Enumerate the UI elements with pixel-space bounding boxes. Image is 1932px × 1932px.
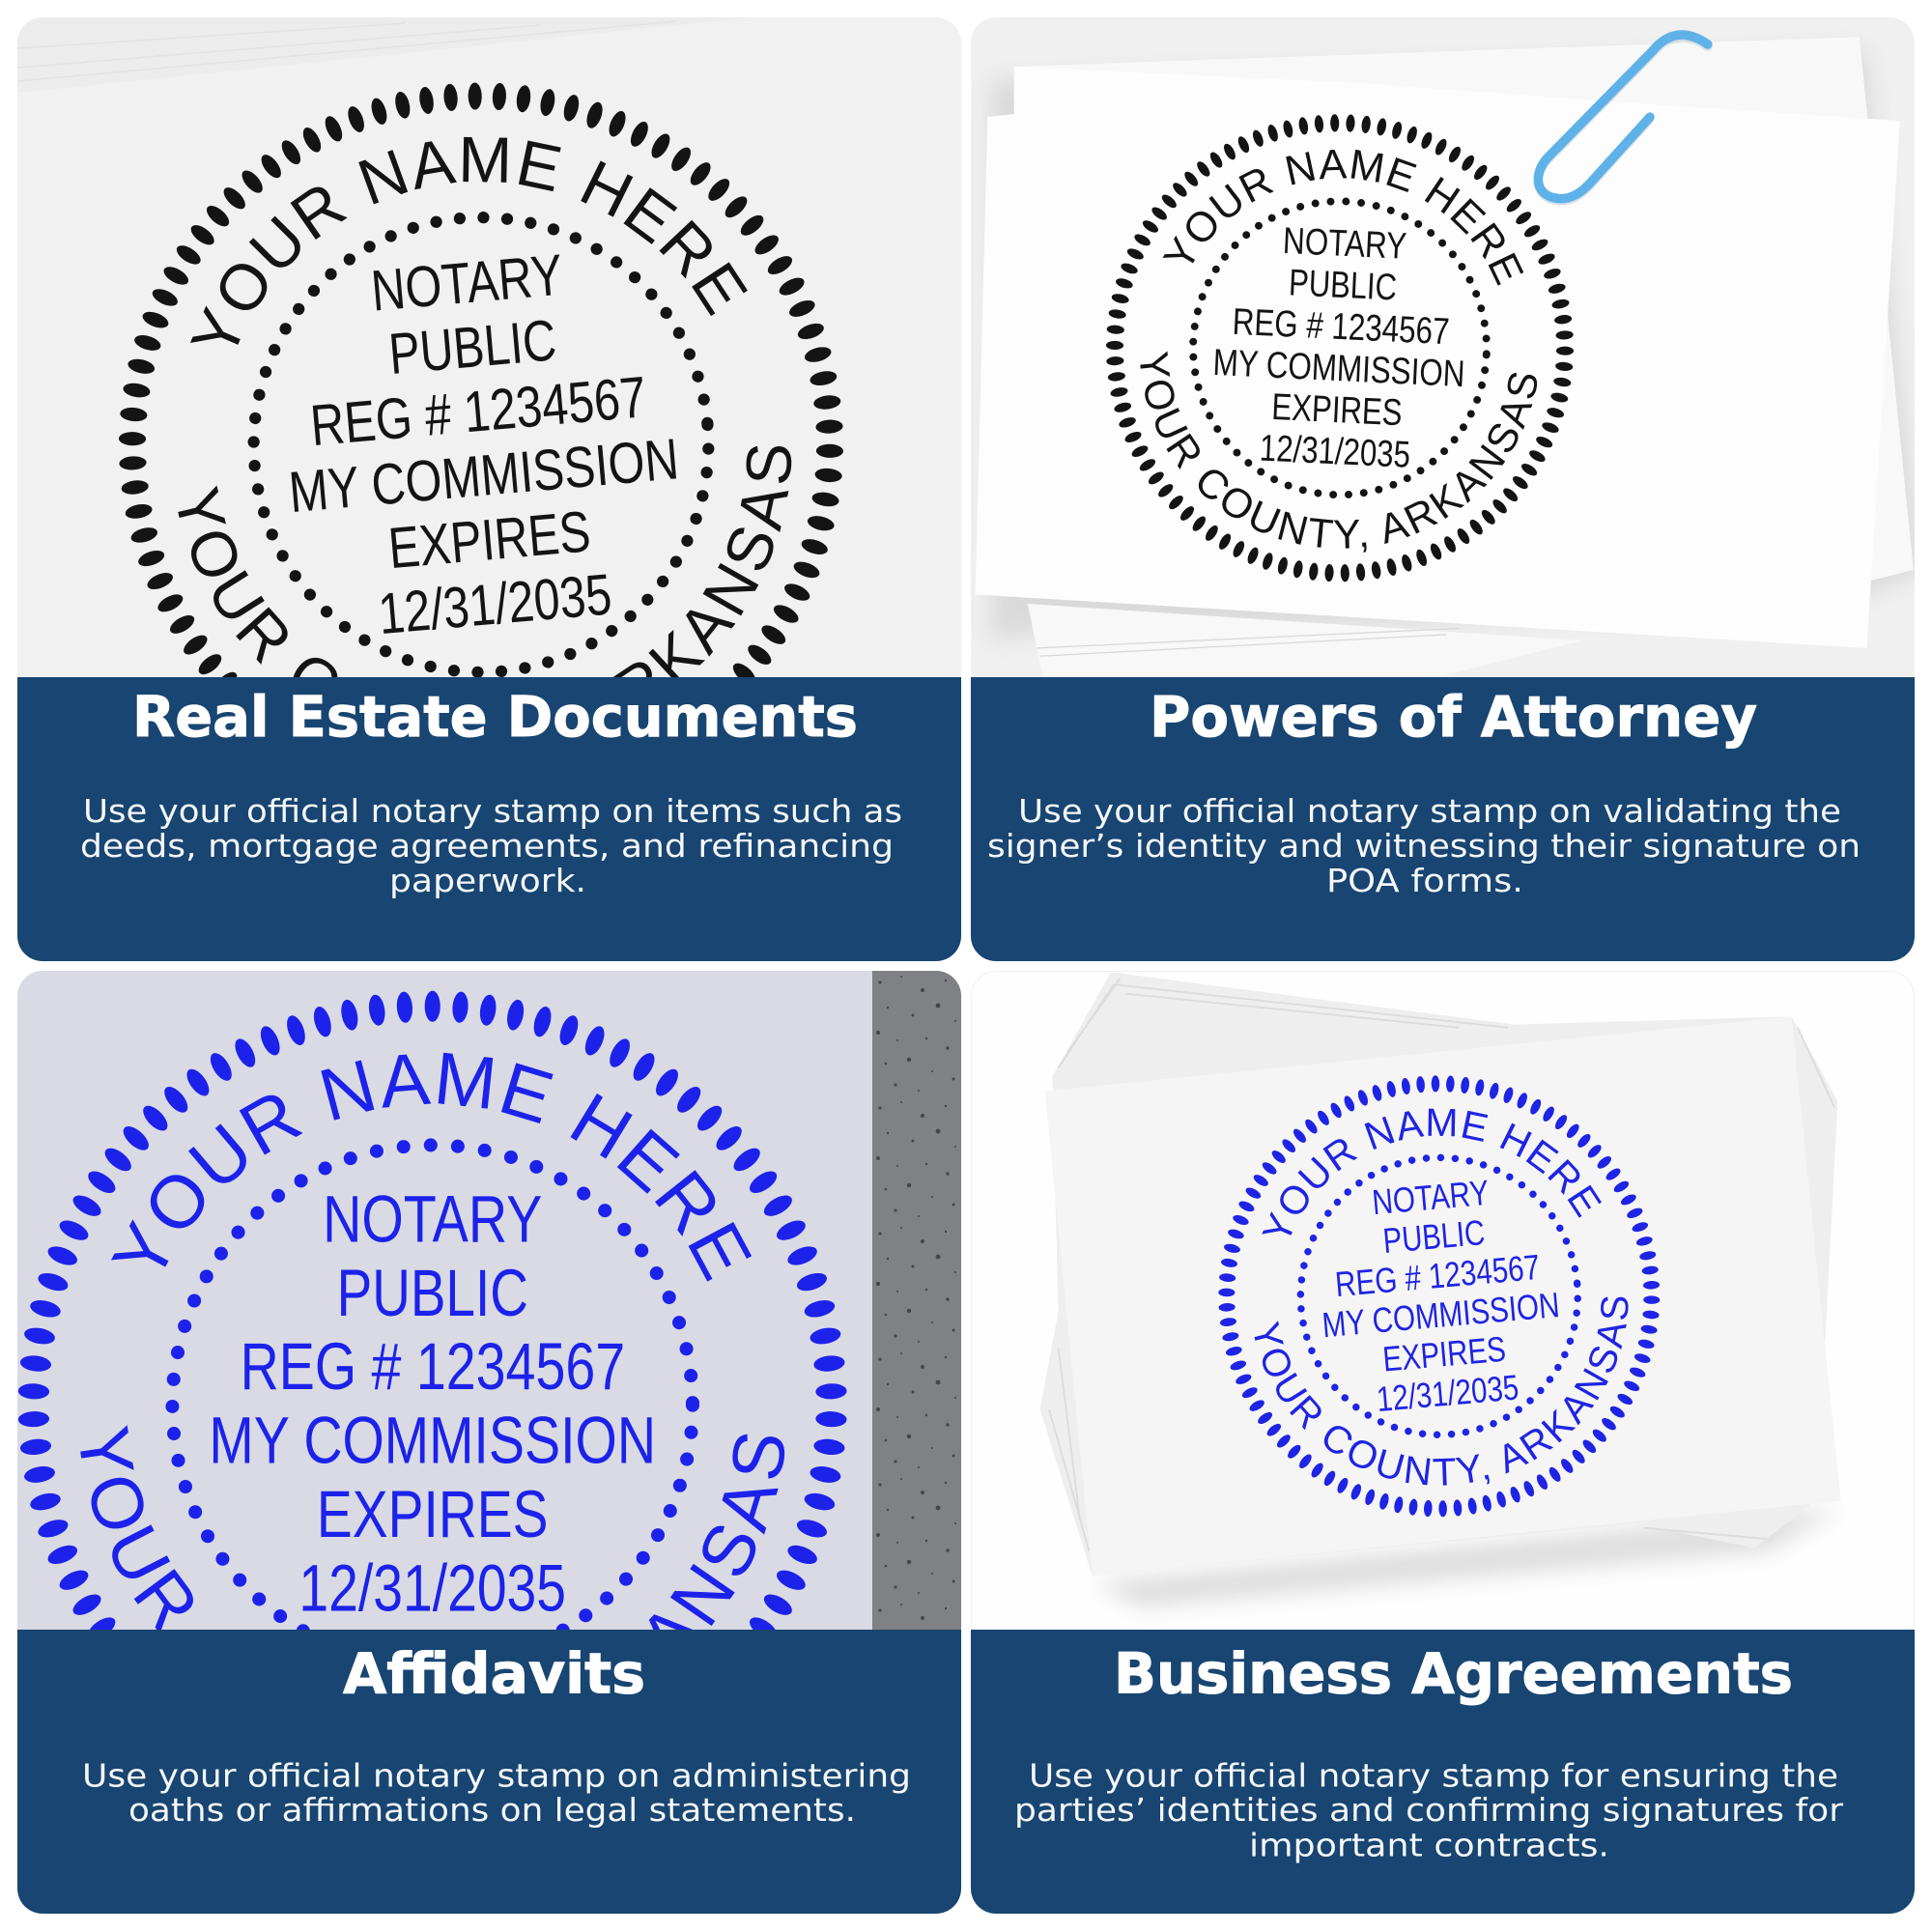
stamp: blue notary seal, large: 12/31/2035 — [298, 1550, 566, 1625]
stamp: black notary seal on paper: NOTARY — [1282, 220, 1407, 268]
stamp: black notary seal on paper: YOUR NAME HERE — [1163, 149, 1524, 286]
photo background: stacked white papers — [971, 17, 1921, 678]
stamp: blue notary seal, large: PUBLIC — [337, 1256, 528, 1330]
body text — [1014, 1758, 1844, 1864]
panel: affidavits — [17, 971, 961, 1914]
stamp: black notary seal, large: REG # 1234567 — [308, 364, 649, 458]
stamp: blue notary seal, large: NOTARY — [323, 1181, 542, 1256]
caption band — [971, 677, 1915, 961]
body text: Use your official notary stamp on administering — [82, 1758, 911, 1795]
photo background: paper — [17, 17, 961, 677]
stamp: blue notary seal, large — [17, 991, 846, 1630]
panel: business agreements — [971, 971, 1915, 1914]
heading: Powers of Attorney — [1150, 684, 1757, 750]
body text: Use your official notary stamp for ensuring the — [1029, 1758, 1838, 1795]
body text — [82, 1758, 911, 1829]
body text: important contracts. — [1249, 1828, 1609, 1864]
stamp: black notary seal, large: PUBLIC — [386, 307, 558, 386]
stamp: blue notary seal on card: PUBLIC — [1381, 1212, 1487, 1261]
body text: Use your official notary stamp on items such as — [83, 793, 902, 830]
body text: paperwork. — [389, 863, 586, 899]
stamp: blue notary seal, large: MY COMMISSION — [209, 1404, 656, 1478]
stamp: black notary seal, large: NOTARY — [368, 242, 565, 324]
caption band — [17, 677, 961, 961]
stamp: blue notary seal on card: NOTARY — [1371, 1173, 1491, 1222]
panel: powers of attorney — [971, 17, 1915, 961]
stamp: black notary seal on paper: MY COMMISSION — [1212, 342, 1465, 395]
stamp: black notary seal, large: YOUR COUNTY, ARKANSAS — [178, 446, 792, 677]
body text: parties’ identities and confirming signatures for — [1014, 1792, 1844, 1829]
stamp: blue notary seal, large: REG # 1234567 — [241, 1329, 625, 1404]
panel: real estate documents — [17, 17, 961, 961]
icon: blue paperclip — [1538, 35, 1708, 201]
body text: deeds, mortgage agreements, and refinancing — [80, 828, 894, 865]
stamp: black notary seal, large: MY COMMISSION — [286, 426, 681, 525]
stamp: blue notary seal on card: MY COMMISSION — [1321, 1285, 1561, 1345]
stamp: blue notary seal on card: YOUR NAME HERE — [1262, 1109, 1602, 1236]
stamp: blue notary seal, large: EXPIRES — [317, 1477, 548, 1551]
stamp: black notary seal on paper: PUBLIC — [1288, 262, 1398, 309]
stamp: black notary seal on paper: REG # 1234567 — [1232, 301, 1450, 353]
caption band — [17, 1630, 961, 1914]
stamp: black notary seal, large — [119, 83, 843, 677]
photo background: stack of cards — [971, 971, 1915, 1648]
body text: signer’s identity and witnessing their signature on — [987, 828, 1861, 865]
heading: Affidavits — [343, 1640, 645, 1706]
stamp: blue notary seal on card: REG # 1234567 — [1334, 1247, 1542, 1304]
stamp: black notary seal on paper: YOUR COUNTY, ARKANSAS — [1140, 352, 1538, 553]
body text: Use your official notary stamp on validating the — [1018, 793, 1841, 830]
stamp: blue notary seal on card: 12/31/2035 — [1375, 1367, 1520, 1419]
stamp: black notary seal on paper — [1105, 114, 1575, 582]
stamp: blue notary seal, large: YOUR NAME HERE — [111, 1053, 752, 1282]
body text — [989, 798, 1858, 893]
stamp: blue notary seal on card: YOUR COUNTY, ARKANSAS — [1254, 1296, 1629, 1486]
body text — [80, 793, 902, 899]
heading: Business Agreements — [1114, 1640, 1793, 1706]
stamp: black notary seal, large: YOUR NAME HERE — [189, 137, 748, 345]
stamp: black notary seal, large: 12/31/2035 — [376, 561, 614, 646]
photo background: lavender paper and concrete — [17, 971, 961, 1630]
caption band — [971, 1630, 1915, 1914]
stamp: black notary seal on paper: 12/31/2035 — [1259, 428, 1411, 476]
stamp: blue notary seal on card — [1218, 1075, 1660, 1517]
body text: oaths or affirmations on legal statements. — [128, 1792, 856, 1829]
stamp: black notary seal on paper: EXPIRES — [1270, 386, 1403, 434]
stamp: black notary seal, large: EXPIRES — [385, 498, 593, 581]
stamp: blue notary seal on card: EXPIRES — [1381, 1329, 1507, 1379]
heading: Real Estate Documents — [132, 684, 858, 750]
body text: POA forms. — [1326, 863, 1523, 899]
stamp: blue notary seal, large: YOUR COUNTY, ARKANSAS — [80, 1425, 784, 1630]
